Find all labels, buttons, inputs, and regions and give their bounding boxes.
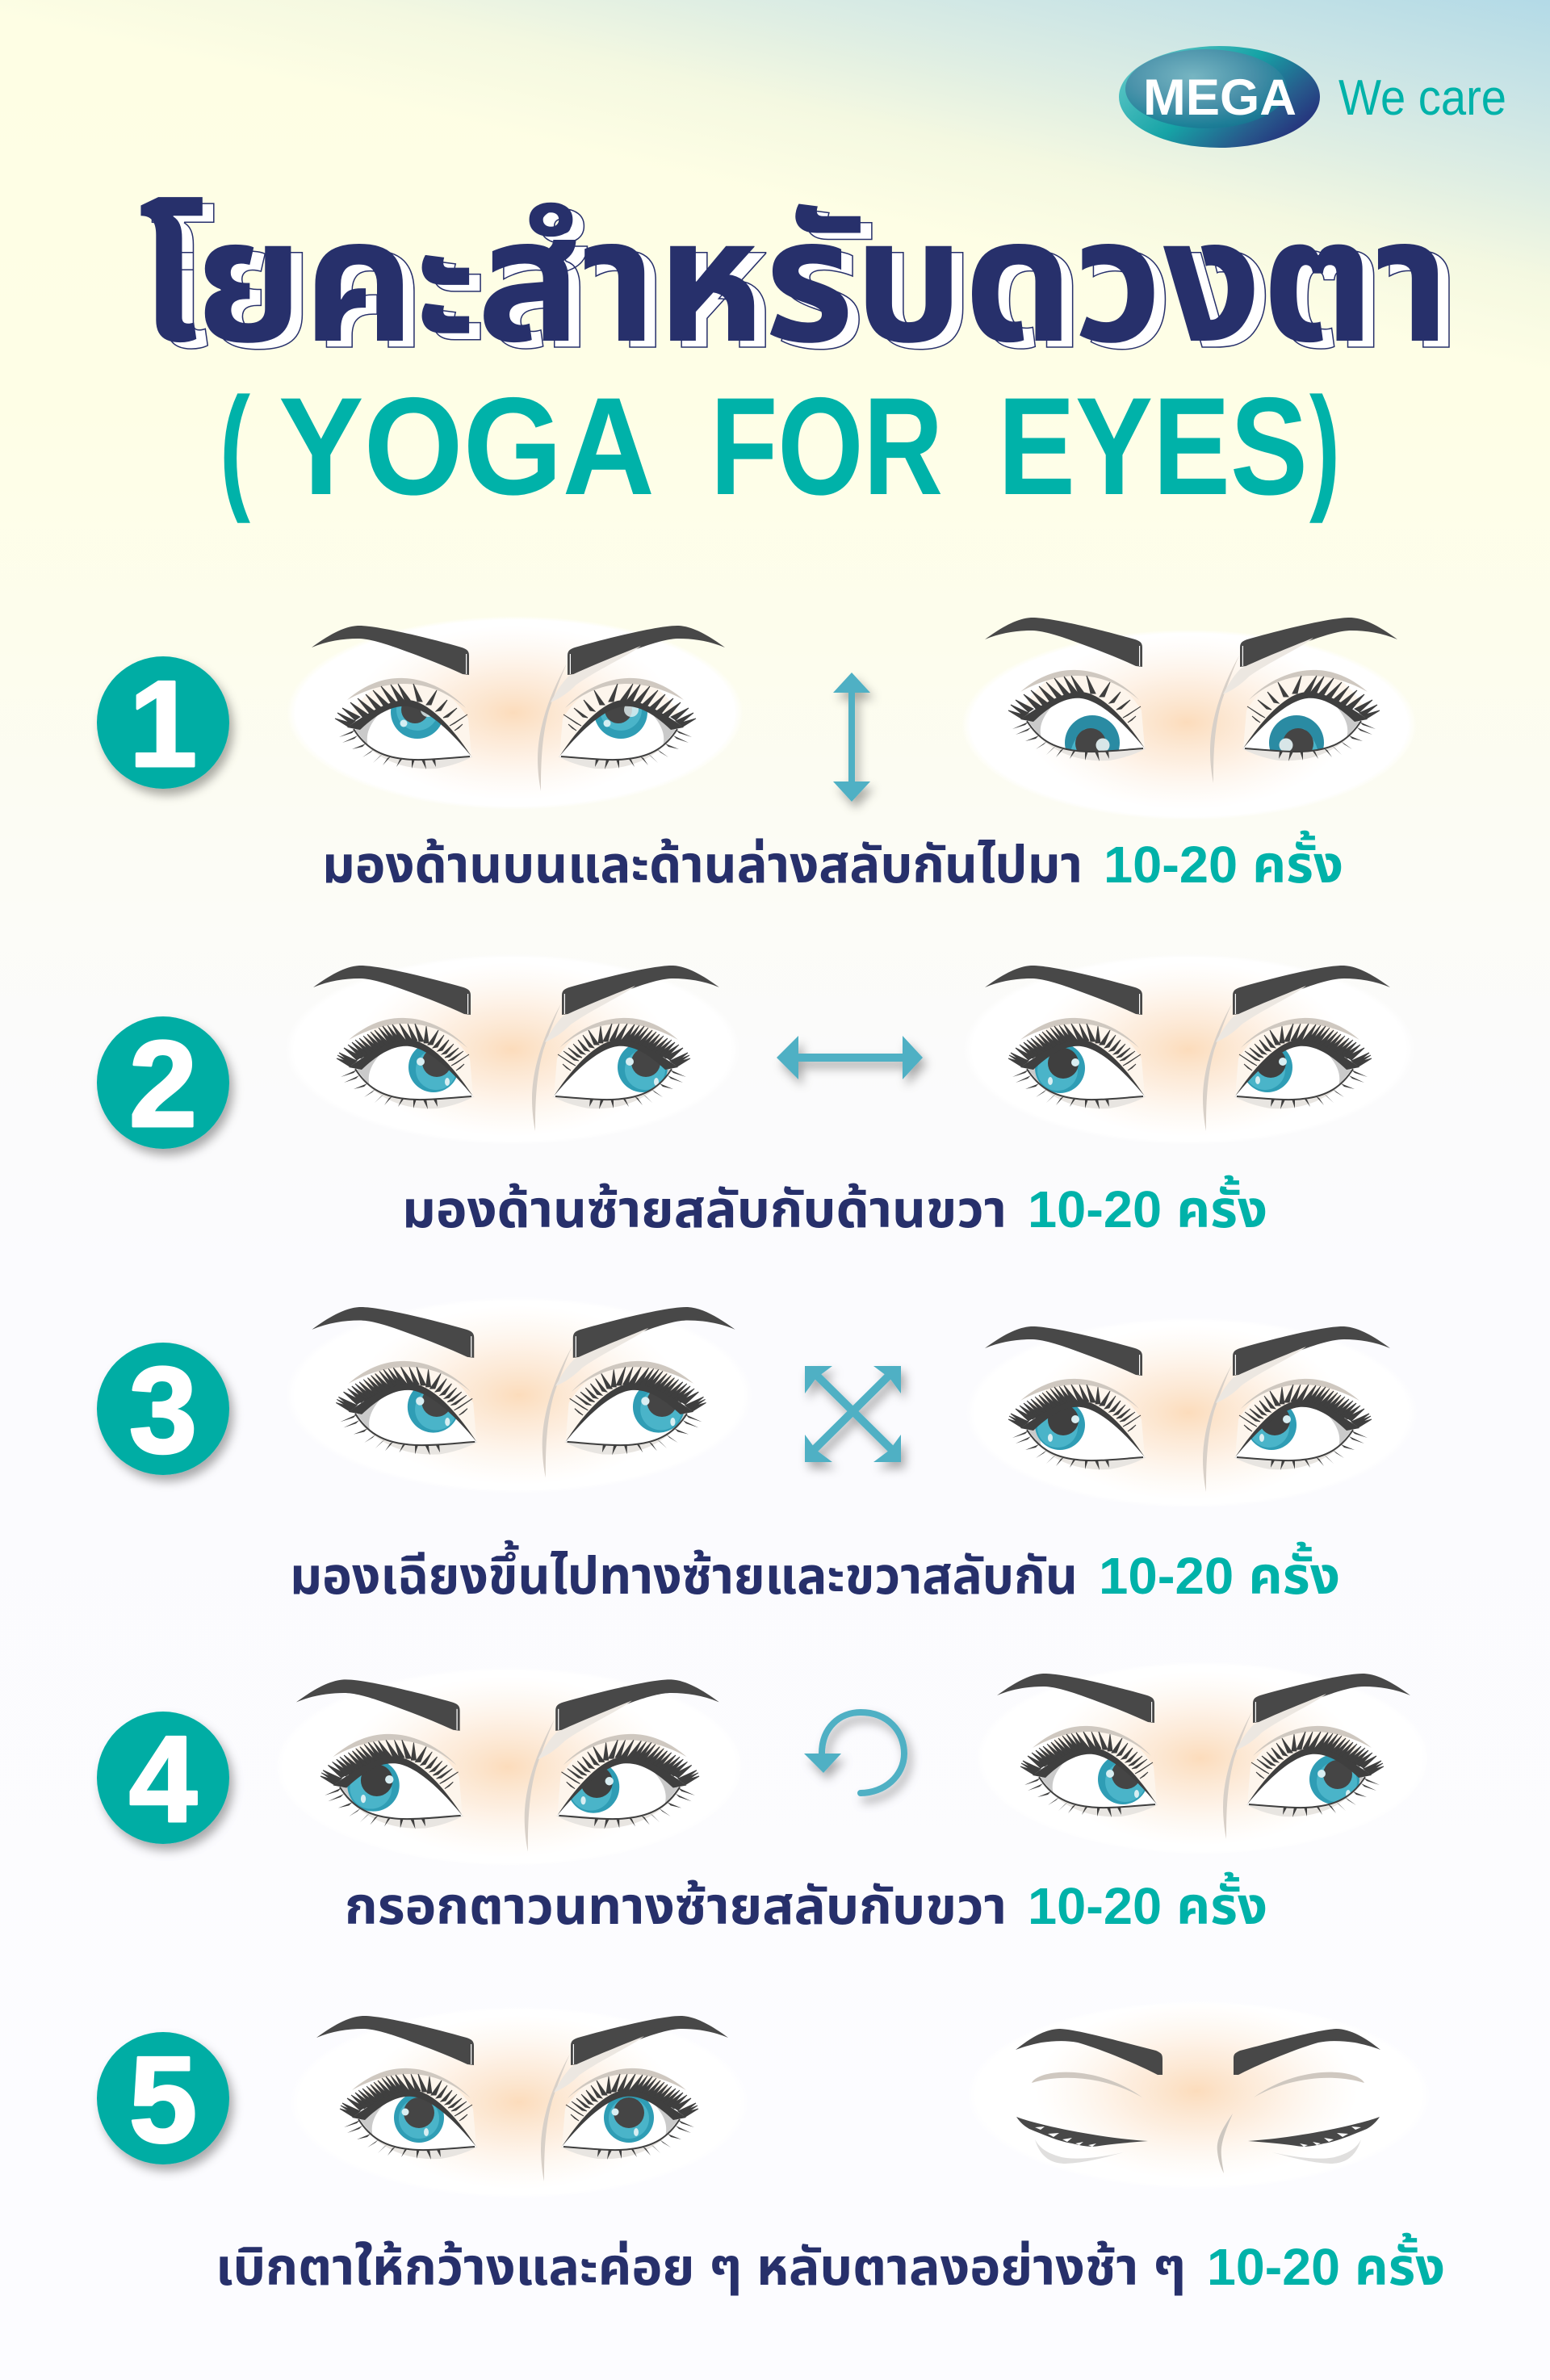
left eye bbox=[335, 678, 473, 769]
right eyebrow and nose line bbox=[541, 2016, 728, 2181]
title: Thai heading with offset outline: โยคะสำหรับดวงตา bbox=[138, 185, 1450, 378]
left eyebrow bbox=[313, 966, 471, 1015]
arrow: diagonal cross bbox=[805, 1366, 901, 1462]
panel: step 2 eyes looking left bbox=[313, 966, 719, 1130]
subtitle: English heading: FOR bbox=[710, 369, 943, 524]
caption: step 3: มองเฉียงขึ้นไปทางซ้ายและขวาสลับกัน bbox=[290, 1540, 1078, 1605]
left eyebrow bbox=[985, 966, 1142, 1015]
panel: step 3 eyes looking up left bbox=[312, 1307, 735, 1477]
right eye bbox=[1234, 1379, 1372, 1470]
left eyebrow bbox=[985, 1326, 1142, 1376]
caption: step 1 bbox=[322, 830, 1343, 894]
left eyebrow bbox=[985, 618, 1142, 667]
left eye bbox=[1020, 1726, 1158, 1817]
right eyebrow and nose line bbox=[532, 966, 719, 1131]
caption: step 4 bbox=[345, 1871, 1267, 1935]
right eye bbox=[563, 1361, 706, 1455]
logo: MEGA We care: MEGA bbox=[1143, 69, 1297, 126]
number badge 1: 1 bbox=[129, 656, 197, 793]
arrow: vertical double bbox=[833, 673, 870, 802]
caption: step 5: 10-20 ครั้ง bbox=[1207, 2232, 1445, 2296]
number badge 4 bbox=[97, 1711, 229, 1848]
left eye bbox=[337, 1018, 475, 1109]
caption: step 5: เบิกตาให้กว้างและค่อย ๆ หลับตาลงอย่างช้า ๆ bbox=[216, 2238, 1186, 2296]
left eye bbox=[340, 2068, 478, 2160]
number badge 3 bbox=[97, 1342, 229, 1479]
right eyebrow and nose line bbox=[1203, 1326, 1390, 1492]
number badge 5: 5 bbox=[129, 2031, 197, 2168]
caption: step 1: มองด้านบนและด้านล่างสลับกันไปมา bbox=[322, 836, 1083, 894]
panel: step 1 eyes looking down bbox=[961, 618, 1417, 820]
number badge 5 bbox=[97, 2031, 229, 2168]
arrow: horizontal double bbox=[777, 1036, 923, 1079]
logo: MEGA We care bbox=[1119, 46, 1506, 148]
panel: step 5 eyes wide open bbox=[289, 2006, 749, 2198]
left eyebrow bbox=[997, 1674, 1154, 1723]
left eye bbox=[336, 1361, 478, 1455]
closed left side bbox=[1016, 2029, 1162, 2164]
caption: step 1: 10-20 ครั้ง bbox=[1104, 830, 1343, 894]
right eyebrow and nose line bbox=[542, 1307, 735, 1477]
left eye bbox=[1008, 1018, 1146, 1109]
caption: step 2: 10-20 ครั้ง bbox=[1028, 1175, 1267, 1238]
right eye bbox=[552, 1018, 690, 1109]
subtitle: English heading: ( bbox=[220, 369, 250, 524]
left eye bbox=[1008, 1379, 1146, 1470]
nose line bbox=[1217, 2114, 1233, 2173]
arrow: rotation bbox=[804, 1712, 904, 1793]
panel: step 3 eyes looking up right bbox=[985, 1326, 1390, 1492]
subtitle: English heading: YOGA bbox=[279, 369, 655, 524]
right eyebrow and nose line bbox=[1203, 966, 1390, 1131]
left eyebrow bbox=[316, 2016, 474, 2065]
logo: MEGA We care: We care bbox=[1338, 70, 1506, 126]
panel: step 4 eyes rolling right bbox=[974, 1661, 1431, 1855]
right eyebrow and nose line bbox=[538, 626, 725, 791]
panel: step 2 eyes looking right bbox=[985, 966, 1390, 1130]
left eyebrow bbox=[312, 1307, 474, 1358]
left eyebrow bbox=[312, 626, 469, 675]
number badge 2: 2 bbox=[129, 1016, 197, 1153]
right eye bbox=[560, 2068, 698, 2160]
subtitle: English heading: EYES bbox=[998, 369, 1308, 524]
left eyebrow bbox=[296, 1679, 460, 1731]
right eyebrow and nose line bbox=[1223, 1674, 1410, 1839]
right eye bbox=[1246, 1726, 1384, 1817]
title: Thai heading with offset outline: โยคะสำหรับดวงตา bbox=[149, 191, 1461, 384]
caption: step 3 bbox=[290, 1540, 1340, 1605]
caption: step 2: มองด้านซ้ายสลับกับด้านขวา bbox=[402, 1180, 1007, 1238]
left eye bbox=[320, 1734, 464, 1829]
closed right side bbox=[1234, 2029, 1380, 2164]
number badge 2 bbox=[97, 1016, 229, 1153]
number badge 3: 3 bbox=[129, 1342, 197, 1479]
right eye bbox=[558, 678, 696, 769]
right eye bbox=[1242, 670, 1380, 770]
number badge 1 bbox=[97, 656, 229, 793]
subtitle: English heading: ) bbox=[1309, 369, 1340, 524]
panel: step 4 eyes rolling left bbox=[274, 1667, 745, 1867]
left eye bbox=[1008, 670, 1146, 770]
panel: step 1 eyes looking up bbox=[287, 616, 744, 810]
caption: step 3: 10-20 ครั้ง bbox=[1099, 1541, 1340, 1605]
number badge 4: 4 bbox=[129, 1711, 197, 1848]
caption: step 2 bbox=[402, 1175, 1267, 1238]
caption: step 4: กรอกตาวนทางซ้ายสลับกับขวา bbox=[345, 1877, 1007, 1935]
subtitle: English heading bbox=[220, 369, 1340, 524]
caption: step 4: 10-20 ครั้ง bbox=[1028, 1871, 1267, 1935]
right eyebrow and nose line bbox=[525, 1679, 719, 1852]
panel: step 5 eyes closed bbox=[966, 2001, 1431, 2189]
right eye bbox=[1234, 1018, 1372, 1109]
right eye bbox=[555, 1734, 699, 1829]
right eyebrow and nose line bbox=[1210, 618, 1397, 783]
